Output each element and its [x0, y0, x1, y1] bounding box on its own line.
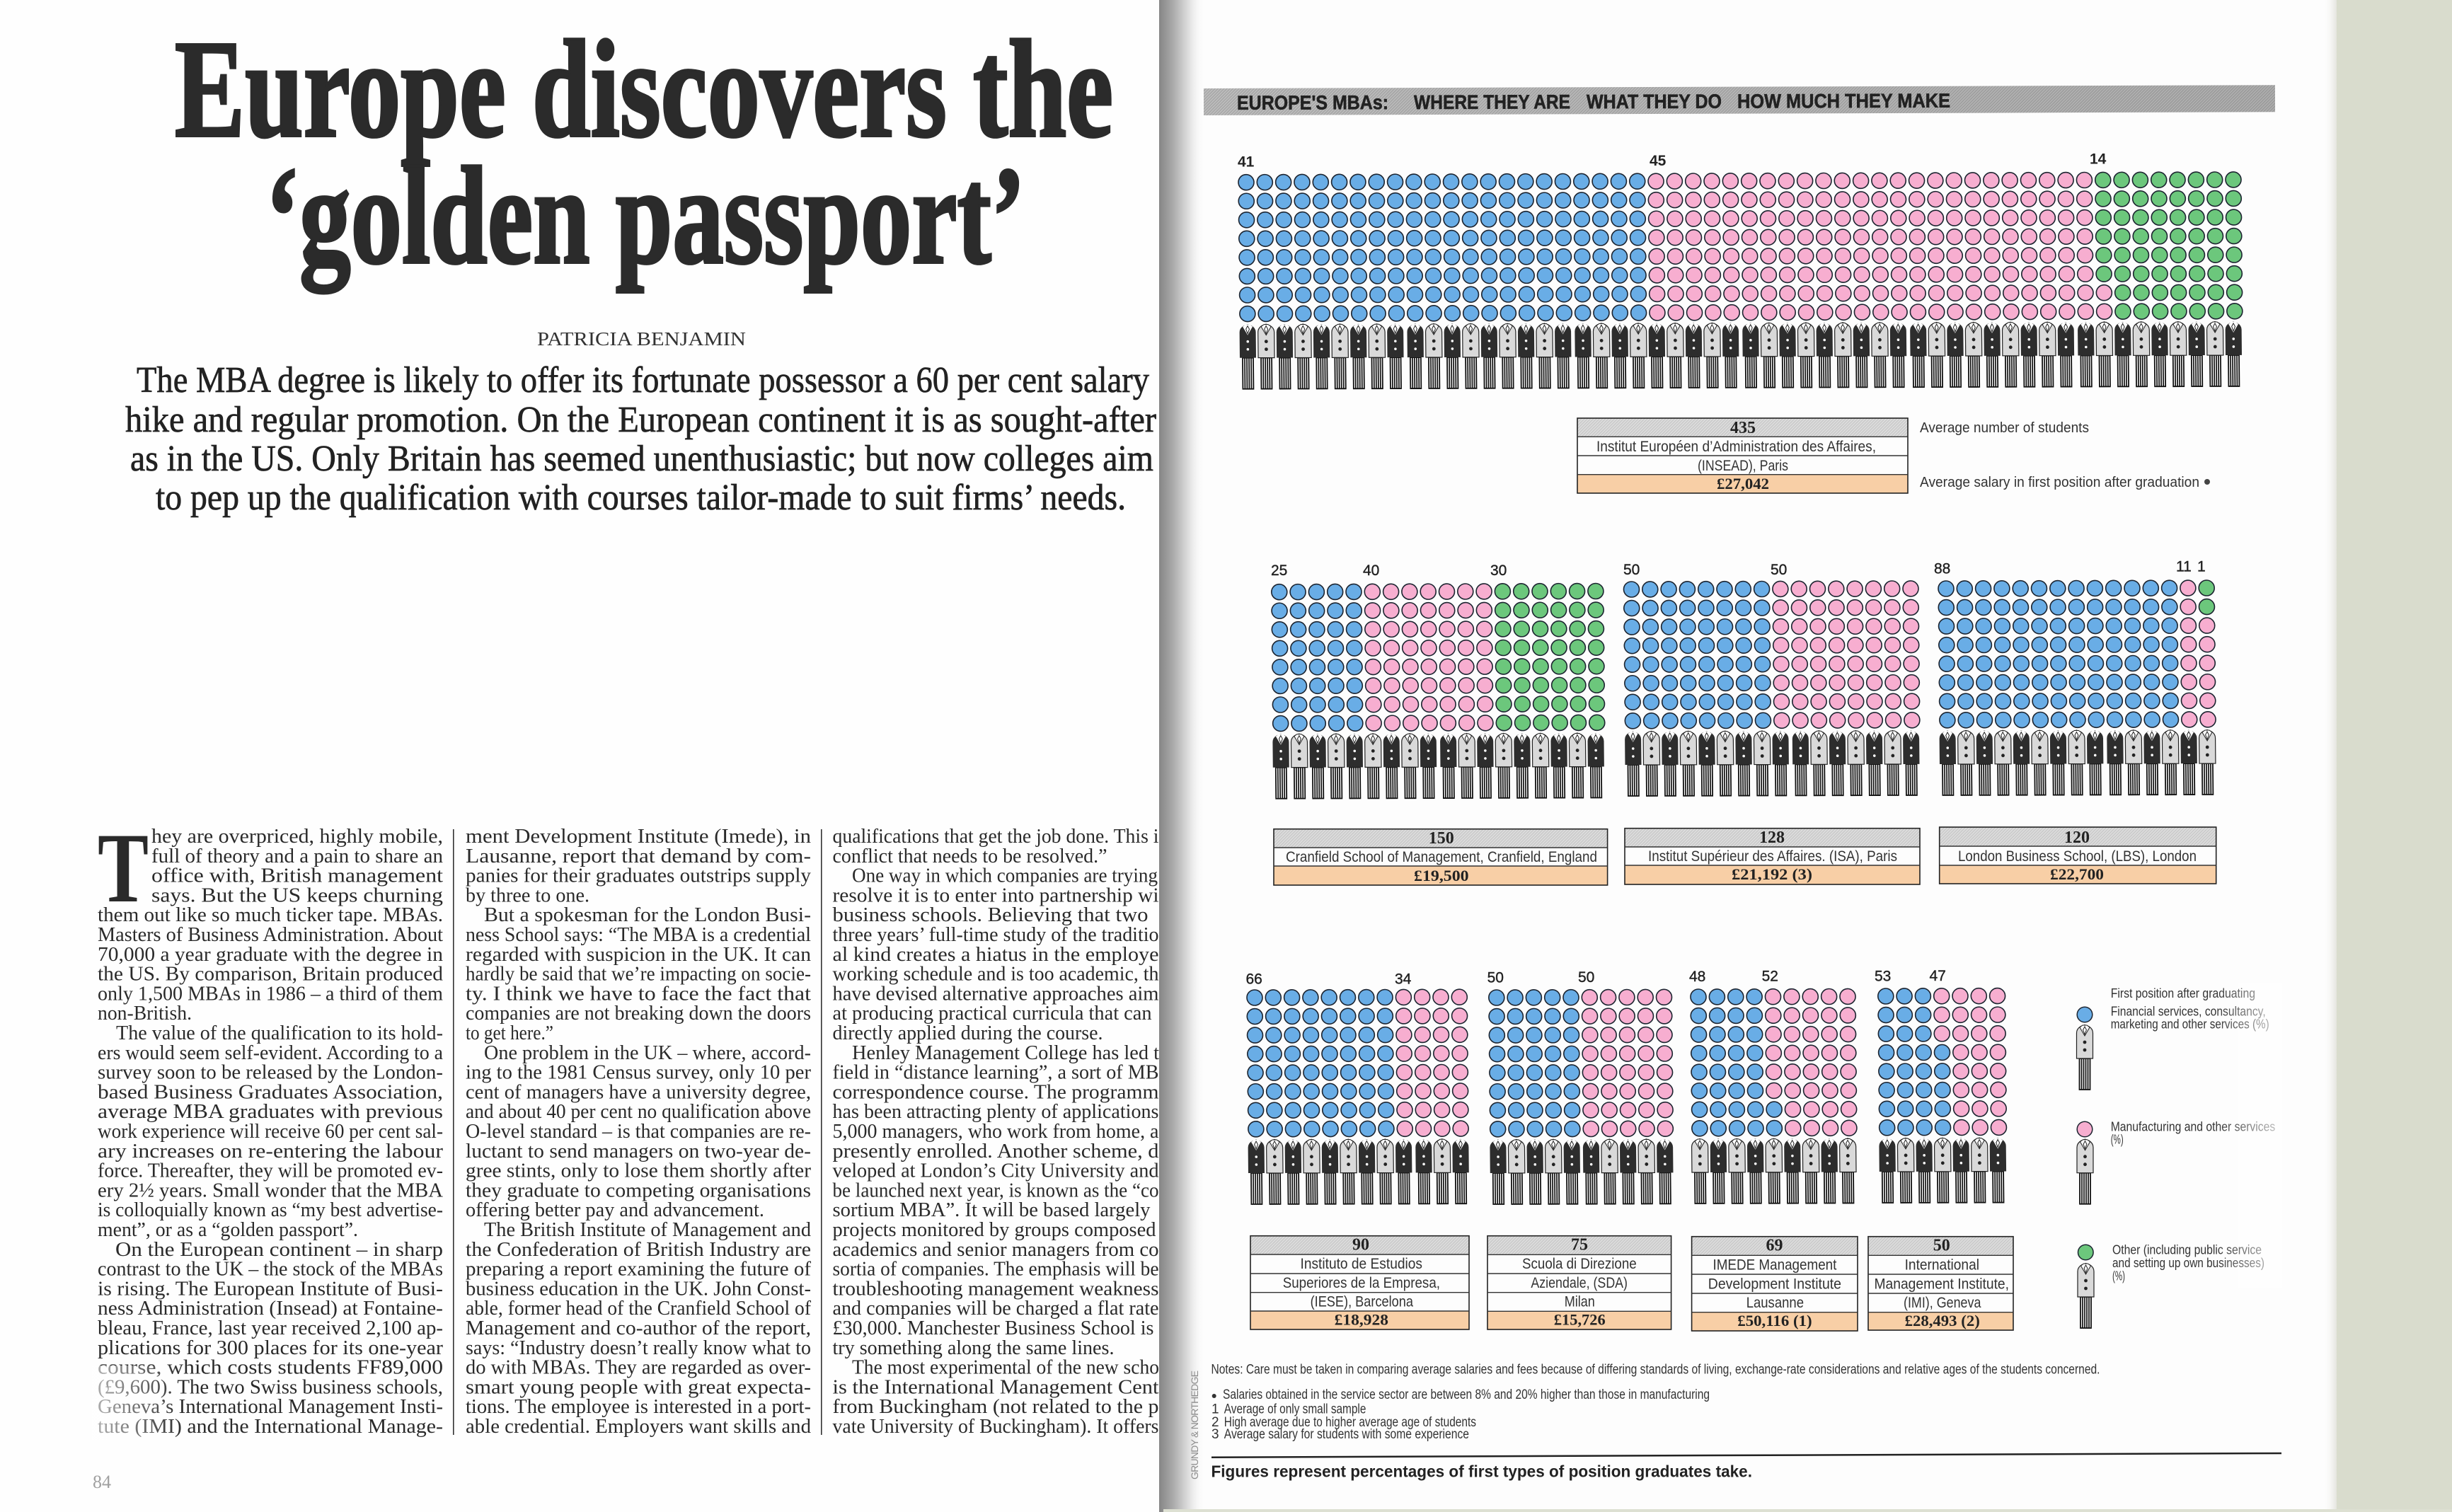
notes: High average due to higher average age of students: [1224, 1415, 1476, 1430]
table: IMEDE: Development Institute: [1708, 1276, 1841, 1293]
article column 2: by three to one.: [466, 884, 589, 906]
article column 2: [466, 825, 812, 1438]
chart labels: LBS percentages: 88: [1934, 561, 1950, 577]
article column 3: field in “distance learning”, a sort of MB: [832, 1061, 1159, 1084]
article column 2: tions. The employee is interested in a port-: [466, 1395, 811, 1418]
bottom page strip: [1163, 1509, 2452, 1512]
table: SDA: 75: [1571, 1236, 1588, 1254]
article column 2: says: “Industry doesn’t really know what to: [466, 1337, 811, 1359]
circles: other: [2199, 580, 2215, 615]
article column 3: projects monitored by groups composed: [832, 1218, 1156, 1241]
standfirst: as in the US. Only Britain has seemed unenthusiastic; but now colleges aim: [130, 439, 1153, 479]
article column 1: On the European continent – in sharp: [115, 1238, 443, 1261]
chart heading band: WHERE THEY ARE: [1414, 91, 1570, 113]
title: ‘golden passport’: [265, 138, 1025, 294]
article column 2: regarded with suspicion in the UK. It can: [466, 943, 812, 966]
article column 1: hey are overpriced, highly mobile,: [151, 825, 443, 848]
standfirst: hike and regular promotion. On the European continent it is as sought-after: [125, 400, 1156, 440]
table: ISA: 128: [1759, 829, 1785, 847]
article column 1: tute (IMI) and the International Manage-: [98, 1415, 443, 1438]
article column 1: is rising. The European Institute of Busi-: [98, 1277, 443, 1300]
table: LBS: £22,700: [2050, 865, 2104, 883]
article column 3: from Buckingham (not related to the p: [832, 1395, 1159, 1418]
circles: financial services, blue: [1238, 173, 1647, 322]
table: LBS: [1940, 827, 2216, 884]
article column 3: £30,000. Manchester Business School is: [832, 1317, 1153, 1339]
article column 3: be launched next year, is known as the “co: [832, 1179, 1159, 1201]
article column 2: ment Development Institute (Imede), in: [466, 825, 812, 848]
table: LBS: London Business School, (LBS), London: [1958, 848, 2197, 865]
table: IESE: [1250, 1236, 1469, 1329]
table: SDA: £15,726: [1554, 1311, 1606, 1329]
notes: Average of only small sample: [1224, 1402, 1366, 1416]
article column 1: (£9,600). The two Swiss business schools,: [98, 1375, 443, 1398]
article column 1: contrast to the UK – the stock of the MBAs: [98, 1258, 443, 1281]
article column 2: panies for their graduates outstrips supply: [466, 865, 811, 887]
article column 2: the Confederation of British Industry are: [466, 1238, 811, 1261]
article column 3: vate University of Buckingham). It offers: [832, 1415, 1159, 1438]
table: ISA: £21,192 (3): [1732, 865, 1812, 883]
page number: 84: [93, 1472, 111, 1492]
article column 2: Management and co-author of the report,: [466, 1317, 811, 1339]
article column 1: ary increases on re-entering the labour: [98, 1140, 443, 1162]
notes: [1211, 1363, 2100, 1442]
suited figures row: [1490, 1139, 1674, 1204]
chart heading band: HOW MUCH THEY MAKE: [1737, 90, 1950, 112]
notes: 1: [1211, 1402, 1219, 1416]
article column 3: al kind creates a hiatus in the employe: [832, 943, 1159, 966]
article column 1: office with, British management: [151, 865, 443, 887]
key: average number of students: Average number of students: [1920, 420, 2089, 436]
article column 2: But a spokesman for the London Busi-: [484, 904, 811, 926]
notes: Salaries obtained in the service sector are between 8% and 20% higher than those in manufacturing: [1223, 1387, 1710, 1402]
table: IMEDE: IMEDE Management: [1713, 1257, 1837, 1273]
table: LBS: 120: [2064, 829, 2090, 847]
article column 2: preparing a report examining the future of: [466, 1258, 811, 1281]
legend item: manufacturing: Manufacturing and other services: [2111, 1119, 2275, 1133]
table: Cranfield: Cranfield School of Management, Cranfield, England: [1286, 849, 1597, 865]
article column 1: survey soon to be released by the London-: [98, 1061, 443, 1084]
article column 3: qualifications that get the job done. This i: [832, 825, 1159, 848]
standfirst: [125, 360, 1156, 518]
chart heading band: EUROPE'S MBAs:: [1237, 91, 1388, 114]
article column 3: veloped at London’s City University and: [832, 1160, 1159, 1182]
article column 2: smart young people with great expecta-: [466, 1375, 811, 1398]
article column 3: try something along the same lines.: [832, 1337, 1114, 1359]
article column 1: Masters of Business Administration. About: [98, 923, 443, 946]
article column 3: and companies will be charged a flat rate: [832, 1297, 1159, 1320]
chart labels: SDA percentages: 50: [1578, 969, 1594, 986]
suited figures row: [1879, 1138, 2007, 1203]
article column 3: presently enrolled. Another scheme, d: [832, 1140, 1159, 1162]
table: INSEAD: [1577, 418, 1908, 493]
footnote caption: Figures represent percentages of first types of position graduates take.: [1211, 1462, 1752, 1481]
article column 1: [98, 825, 444, 1438]
notes: Notes: Care must be taken in comparing average salaries and fees because of differing standards of living, exchange-rate considerations and relative ages of the students concerned.: [1211, 1363, 2100, 1378]
article column 3: resolve it is to enter into partnership wi: [832, 884, 1159, 906]
article column 1: non-British.: [98, 1002, 192, 1025]
legend item: manufacturing: [2077, 1119, 2275, 1204]
left page: [0, 0, 1175, 1512]
chart labels: Cranfield percentages: 40: [1363, 562, 1379, 579]
article column 2: business education in the UK. John Const-: [466, 1277, 811, 1300]
article column 2: companies are not breaking down the doors: [466, 1002, 811, 1025]
circles: manufacturing: [1773, 581, 1920, 728]
table: SDA: [1487, 1236, 1671, 1329]
article column 2: luctant to send managers on two-year de-: [466, 1140, 811, 1162]
article column 3: has been attracting plenty of applications: [832, 1100, 1159, 1123]
article column 1: them out like so much ticker tape. MBAs.: [98, 904, 443, 926]
chart labels: INSEAD percentages: 45: [1650, 153, 1667, 169]
chart labels: LBS percentages: 11: [2176, 559, 2192, 575]
table: IMI: [1868, 1237, 2013, 1330]
article column 2: cent of managers have a university degree,: [466, 1080, 811, 1103]
article column 2: to get here.”: [466, 1022, 553, 1044]
article column 1: 70,000 a year graduate with the degree in: [98, 943, 444, 966]
chart labels: ISA percentages: 50: [1623, 562, 1640, 578]
table: IMI: £28,493 (2): [1905, 1312, 1980, 1329]
table: SDA: Scuola di Direzione: [1522, 1256, 1637, 1272]
circles: manufacturing: [1582, 989, 1673, 1137]
suited figures row: [1691, 1138, 1856, 1204]
article column 3: is the International Management Cent: [832, 1375, 1159, 1398]
article column 1: average MBA graduates with previous: [98, 1100, 443, 1123]
chart labels: IMEDE percentages: 52: [1762, 969, 1778, 985]
circles: financial services: [1623, 581, 1771, 729]
suited figures row: [1272, 733, 1604, 799]
table: IMI: 50: [1933, 1237, 1950, 1255]
article column 1: bleau, France, last year received 2,100 ap-: [98, 1317, 443, 1339]
chart labels: SDA percentages: 50: [1487, 969, 1504, 986]
chart labels: IESE percentages: 66: [1245, 971, 1262, 988]
legend: [2076, 986, 2275, 1328]
table: IESE: 90: [1352, 1236, 1369, 1254]
article column 3: One way in which companies are trying: [852, 865, 1158, 887]
circles: manufacturing: [2180, 580, 2216, 727]
table: IESE: (IESE), Barcelona: [1311, 1294, 1413, 1310]
article column 3: working schedule and is too academic, th: [832, 963, 1159, 986]
legend item: financial services: [2076, 1005, 2269, 1090]
legend item: other: Other (including public service: [2112, 1243, 2262, 1257]
circles: other: [1495, 583, 1605, 731]
article column 3: conflict that needs to be resolved.”: [832, 845, 1107, 867]
circles: manufacturing, pink: [1648, 172, 2112, 321]
article column 3: business schools. Believing that two: [832, 904, 1148, 926]
table: ISA: Institut Supérieur des Affaires. (ISA), Paris: [1648, 848, 1897, 865]
standfirst: The MBA degree is likely to offer its fortunate possessor a 60 per cent salary: [137, 360, 1149, 400]
chart labels: INSEAD percentages: [1238, 151, 2107, 171]
title: [175, 11, 1113, 294]
article column 3: The most experimental of the new scho: [852, 1356, 1159, 1379]
article column 1: full of theory and a pain to share an: [151, 845, 443, 867]
circles: financial services: [1878, 988, 1951, 1136]
table: Cranfield: £19,500: [1414, 867, 1469, 884]
suited figures row: [1239, 321, 2242, 389]
table: INSEAD: 435: [1730, 419, 1756, 437]
chart labels: Cranfield percentages: 25: [1271, 562, 1287, 579]
article column 1: work experience will receive 60 per cent sal-: [98, 1120, 443, 1143]
article column 1: Geneva’s International Management Insti-: [98, 1395, 443, 1418]
article column 3: three years’ full-time study of the traditio: [832, 923, 1159, 946]
article column 3: academics and senior managers from co: [832, 1238, 1159, 1261]
people chart: INSEAD: [1238, 172, 2243, 389]
circles: financial services: [1247, 989, 1394, 1137]
article column 3: troubleshooting management weakness: [832, 1277, 1159, 1300]
article column 3: at producing practical curricula that can: [832, 1002, 1152, 1025]
notes: 3: [1211, 1427, 1219, 1442]
circles: manufacturing: [1765, 988, 1857, 1136]
article column 2: Lausanne, report that demand by com-: [466, 845, 811, 867]
article column 1: ers would seem self-evident. According to a: [98, 1041, 443, 1064]
article column 3: sortium MBA”. It will be based largely: [832, 1199, 1151, 1221]
legend item: other: (%): [2112, 1269, 2125, 1283]
circles: manufacturing: [1364, 584, 1493, 731]
legend item: other: [2078, 1243, 2264, 1328]
article column 1: the US. By comparison, Britain produced: [98, 963, 443, 986]
circles: other, green: [2095, 172, 2243, 319]
people chart: IMI: [1877, 988, 2008, 1203]
table: ISA: [1625, 829, 1920, 884]
article column 3: [832, 825, 1159, 1438]
chart labels: IMI percentages: 53: [1875, 969, 1891, 985]
chart labels: IESE percentages: 34: [1395, 971, 1412, 988]
table: INSEAD: (INSEAD), Paris: [1698, 458, 1788, 474]
table: IMI: International: [1905, 1257, 1979, 1273]
article column 1: ness Administration (Insead) at Fontaine-: [98, 1297, 443, 1320]
article column 3: 5,000 managers, who work from home, a: [832, 1120, 1159, 1143]
article column 1: The value of the qualification to its hold-: [116, 1022, 443, 1044]
circles: financial services: [1691, 989, 1783, 1136]
article column 1: says. But the US keeps churning: [151, 884, 443, 906]
chart labels: IMI percentages: [1875, 968, 1946, 985]
people chart: Cranfield: [1271, 583, 1606, 799]
legend item: financial services: marketing and other services (%): [2111, 1017, 2269, 1031]
people chart: SDA: [1488, 989, 1674, 1204]
title: Europe discovers the: [175, 11, 1113, 166]
article column 1: force. Thereafter, they will be promoted ev-: [98, 1160, 443, 1182]
standfirst: to pep up the qualification with courses tailor-made to suit firms’ needs.: [156, 478, 1126, 518]
article column 2: gree stints, only to lose them shortly after: [466, 1160, 811, 1182]
article column 1: is colloquially known as “my best advertise-: [98, 1199, 443, 1221]
article column 2: ness School says: “The MBA is a credential: [466, 923, 811, 946]
article column 2: offering better pay and advancement.: [466, 1199, 764, 1221]
article column 2: O-level standard – is that companies are re-: [466, 1120, 811, 1143]
article column 1: only 1,500 MBAs in 1986 – a third of them: [98, 982, 443, 1005]
article column 3: correspondence course. The programm: [832, 1080, 1159, 1103]
chart labels: LBS percentages: 1: [2197, 559, 2206, 575]
article column 3: have devised alternative approaches aim: [832, 982, 1159, 1005]
people chart: IESE: [1246, 989, 1469, 1204]
people chart: LBS: [1938, 580, 2216, 795]
chart labels: Cranfield percentages: 30: [1490, 562, 1507, 579]
article column 2: ty. I think we have to face the fact that: [466, 982, 811, 1005]
table: IESE: Superiores de la Empresa,: [1283, 1275, 1440, 1291]
article column 1: based Business Graduates Association,: [98, 1080, 443, 1103]
chart labels: ISA percentages: 50: [1771, 562, 1787, 578]
article column 2: ing to the 1981 Census survey, only 10 per: [466, 1061, 811, 1084]
table: IMI: (IMI), Geneva: [1904, 1295, 1981, 1311]
byline: PATRICIA BENJAMIN: [537, 328, 746, 350]
chart labels: INSEAD percentages: 41: [1238, 154, 1255, 171]
article column 1: ery 2½ years. Small wonder that the MBA: [98, 1179, 443, 1201]
chart labels: INSEAD percentages: 14: [2090, 151, 2107, 168]
chart labels: SDA percentages: [1487, 969, 1594, 986]
chart labels: IMEDE percentages: [1689, 969, 1778, 985]
article column 2: and about 40 per cent no qualification above: [466, 1100, 811, 1123]
chart heading band: [1204, 85, 2275, 115]
article column 2: hardly be said that we’re impacting on socie-: [466, 963, 811, 986]
article column 3: Henley Management College has led t: [852, 1041, 1159, 1064]
chart labels: IESE percentages: [1245, 971, 1412, 988]
chart labels: Cranfield percentages: [1271, 562, 1507, 579]
drop cap: T: [98, 813, 149, 923]
table: IMEDE: [1692, 1237, 1858, 1331]
circles: manufacturing: [1395, 989, 1468, 1136]
chart labels: IMI percentages: 47: [1929, 968, 1946, 984]
article column 1: course, which costs students FF89,000: [98, 1356, 443, 1379]
right page: [1161, 0, 2337, 1509]
table: Cranfield: 150: [1429, 829, 1454, 848]
suited figures row: [1248, 1139, 1469, 1204]
circles: financial services: [1272, 584, 1363, 732]
article column 2: able, former head of the Cranfield School of: [466, 1297, 811, 1320]
table: INSEAD: £27,042: [1717, 475, 1769, 492]
notes: 2: [1211, 1415, 1219, 1430]
suited figures row: [1625, 730, 1920, 796]
suited figures row: [1940, 729, 2216, 795]
table: INSEAD: Institut Européen d’Administration des Affaires,: [1596, 439, 1876, 455]
notes: Average salary for students with some experience: [1224, 1427, 1469, 1442]
people chart: ISA: [1623, 581, 1921, 796]
article column 2: The British Institute of Management and: [484, 1218, 811, 1241]
chart heading band: WHAT THEY DO: [1587, 91, 1722, 112]
article column 2: One problem in the UK – where, accord-: [484, 1041, 811, 1064]
legend item: financial services: Financial services, consultancy,: [2111, 1005, 2266, 1019]
legend item: manufacturing: (%): [2111, 1133, 2124, 1147]
photo credit: GRUNDY & NORTHEDGE: [1189, 1370, 1200, 1479]
gutter shadow: [1159, 0, 1206, 1512]
article column 3: sortia of companies. The emphasis will be: [832, 1258, 1159, 1281]
chart labels: IMEDE percentages: 48: [1689, 969, 1705, 985]
table: IESE: Instituto de Estudios: [1301, 1256, 1422, 1272]
circles: financial services: [1938, 580, 2179, 728]
table: SDA: Milan: [1565, 1294, 1595, 1310]
table: IMEDE: £50,116 (1): [1737, 1312, 1812, 1329]
table: IMEDE: Lausanne: [1746, 1295, 1804, 1311]
article column 1: plications for 300 places for its one-year: [98, 1337, 443, 1359]
article column 2: do with MBAs. They are regarded as over-: [466, 1356, 811, 1379]
circles: financial services: [1489, 990, 1580, 1137]
table: SDA: Aziendale, (SDA): [1531, 1275, 1628, 1291]
article column 2: they graduate to competing organisations: [466, 1179, 811, 1201]
legend heading: First position after graduating: [2111, 986, 2255, 1000]
key: average salary: Average salary in first position after graduation: [1920, 475, 2199, 490]
legend item: other: and setting up own businesses): [2112, 1256, 2264, 1270]
article column 1: ment”, or as a “golden passport”.: [98, 1218, 358, 1241]
people chart: IMEDE: [1690, 988, 1858, 1204]
table: Cranfield: [1274, 829, 1608, 885]
article column 2: able credential. Employers want skills and: [466, 1415, 811, 1438]
chart labels: ISA percentages: [1623, 562, 1787, 578]
table: IMEDE: 69: [1766, 1237, 1783, 1255]
table: IESE: £18,928: [1335, 1311, 1388, 1329]
chart labels: LBS percentages: [1934, 559, 2206, 577]
circles: manufacturing: [1934, 988, 2007, 1136]
table: IMI: Management Institute,: [1874, 1276, 2009, 1293]
article column 3: directly applied during the course.: [832, 1022, 1103, 1044]
